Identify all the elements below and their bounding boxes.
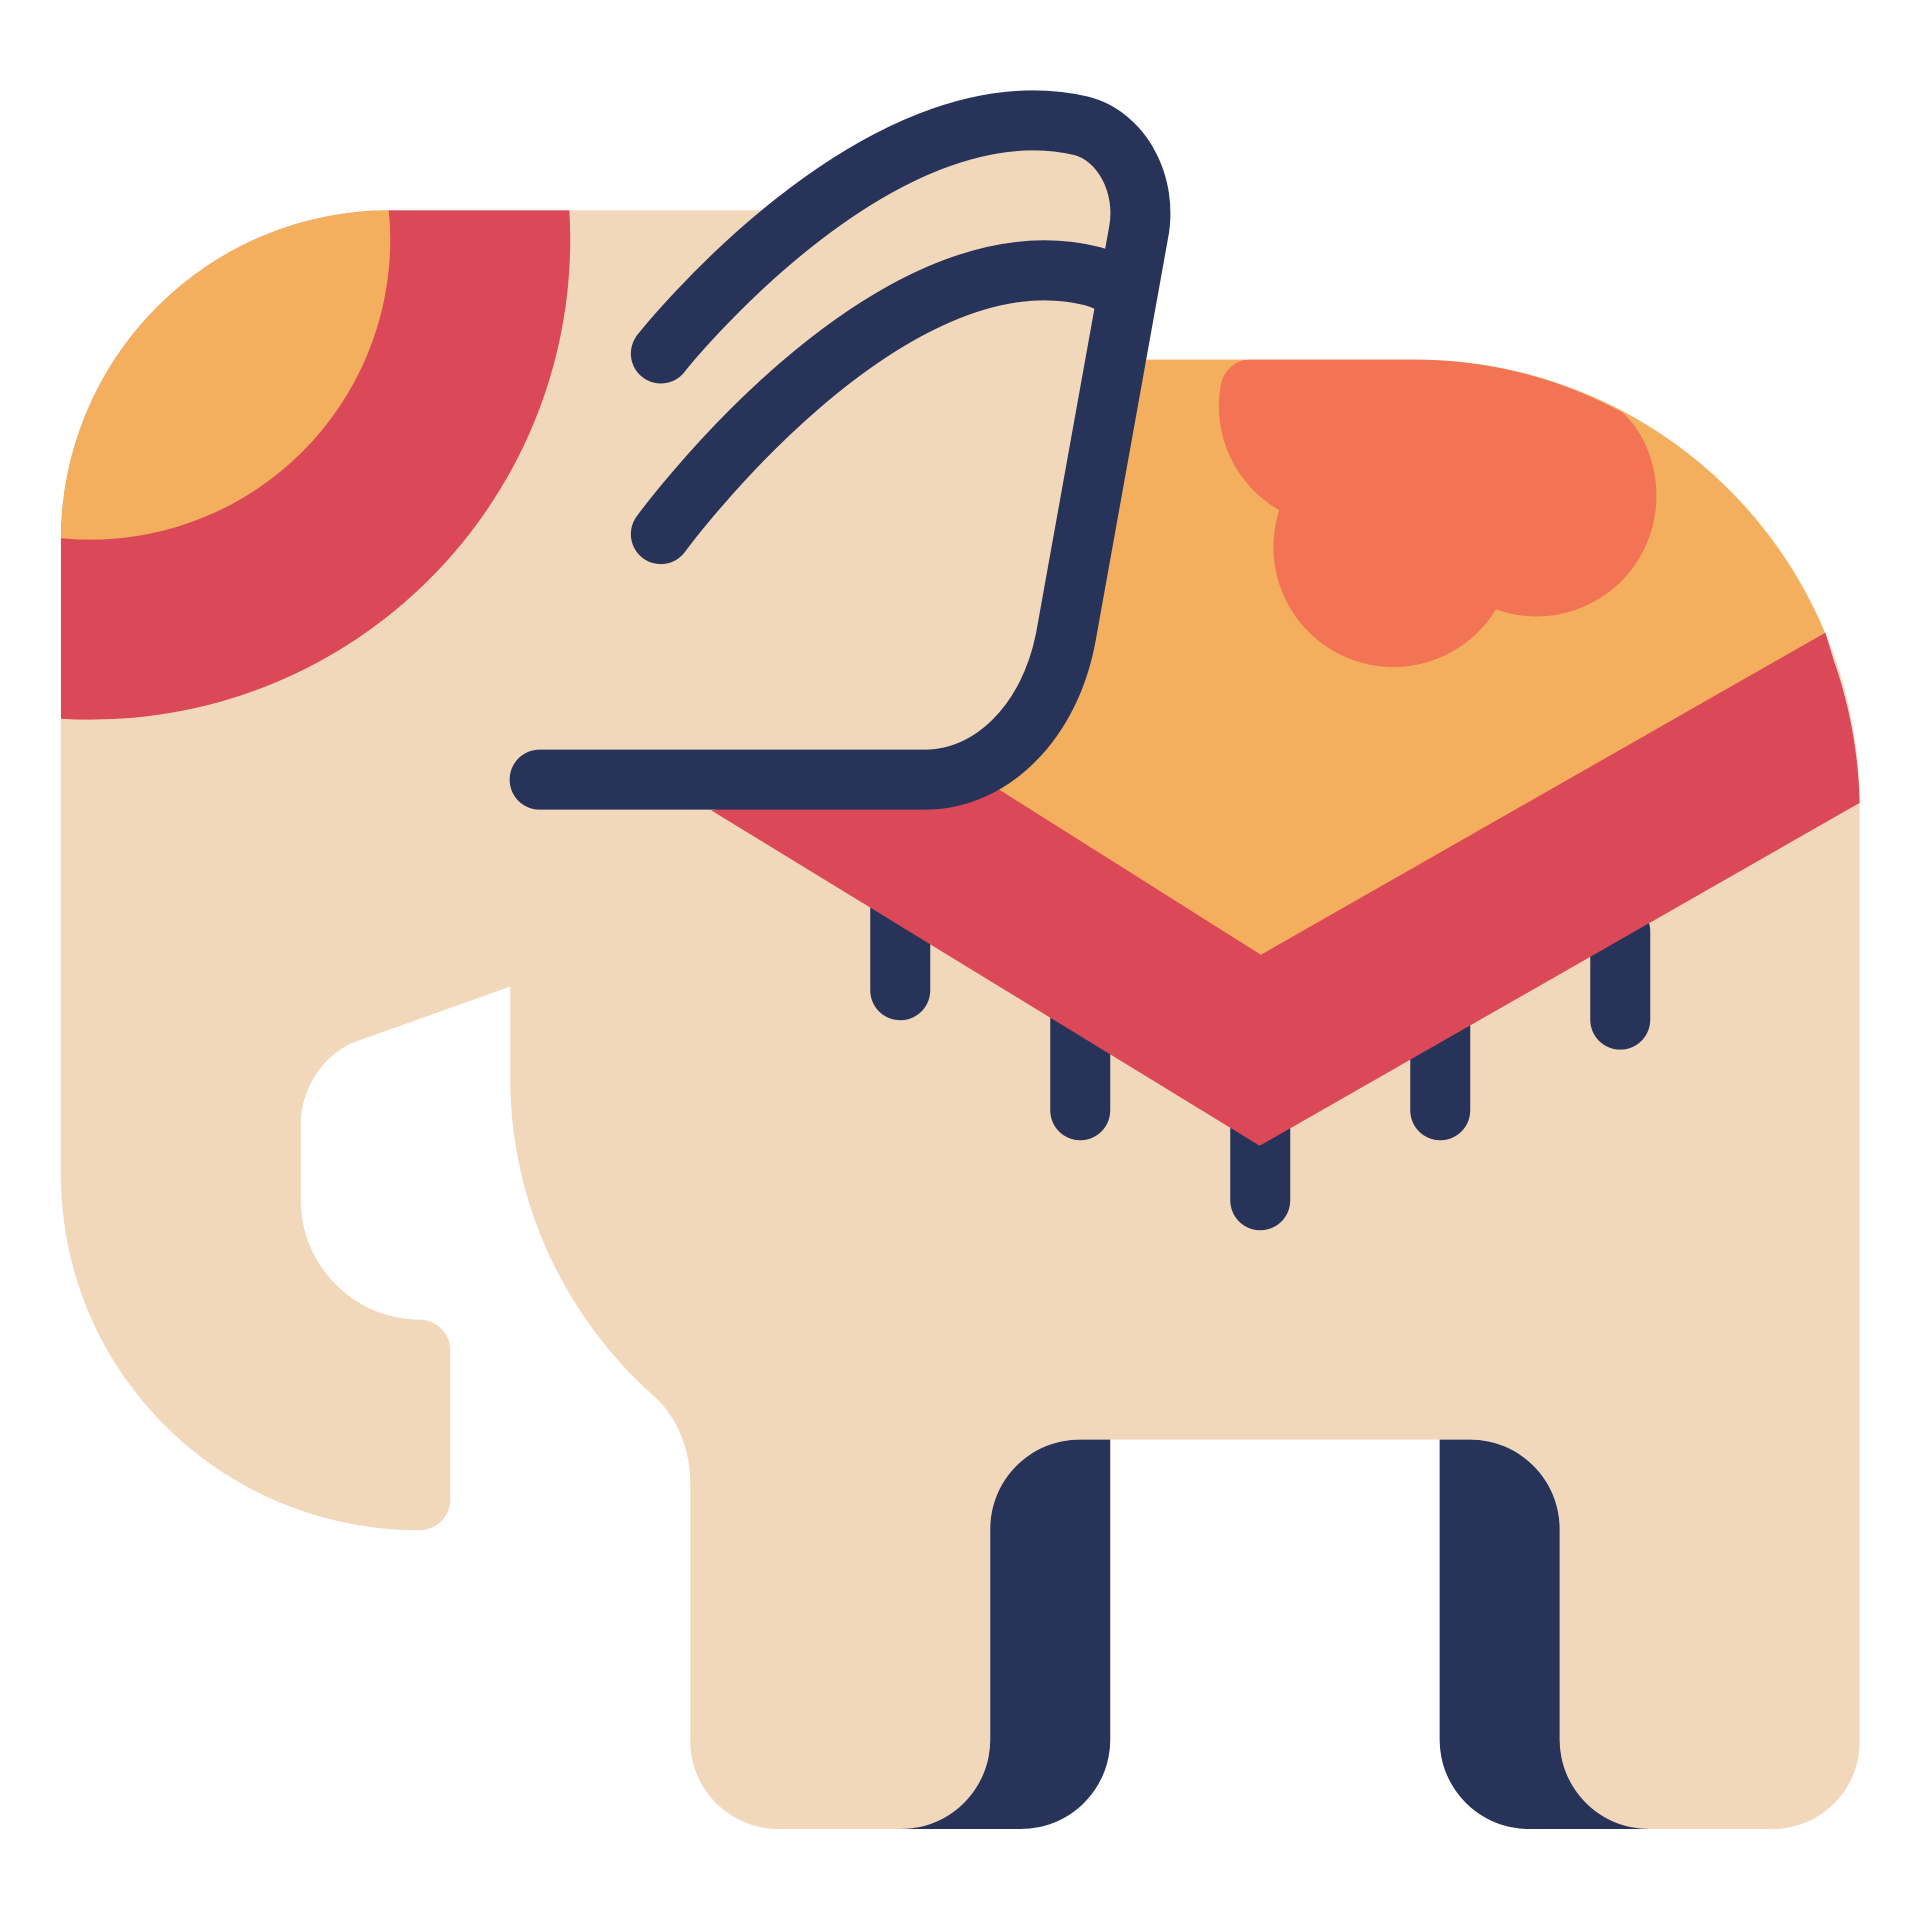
icon: back leg right [1440, 1440, 1649, 1829]
icon: red blanket band [711, 633, 1860, 1146]
icon: orange blanket [956, 360, 1825, 955]
icon: blanket fringe [900, 882, 1620, 1200]
head decoration red ring [60, 210, 570, 720]
icon: back leg left [901, 1440, 1110, 1829]
icon: ear outline [540, 120, 1140, 780]
icon: coral blanket pattern [1219, 360, 1656, 667]
icon: head decoration [60, 210, 570, 720]
icon: elephant body [61, 210, 1860, 1829]
head decoration orange circle [61, 210, 390, 540]
icon: ear inner fold [661, 270, 1121, 534]
icon: ear fill [613, 118, 1140, 780]
